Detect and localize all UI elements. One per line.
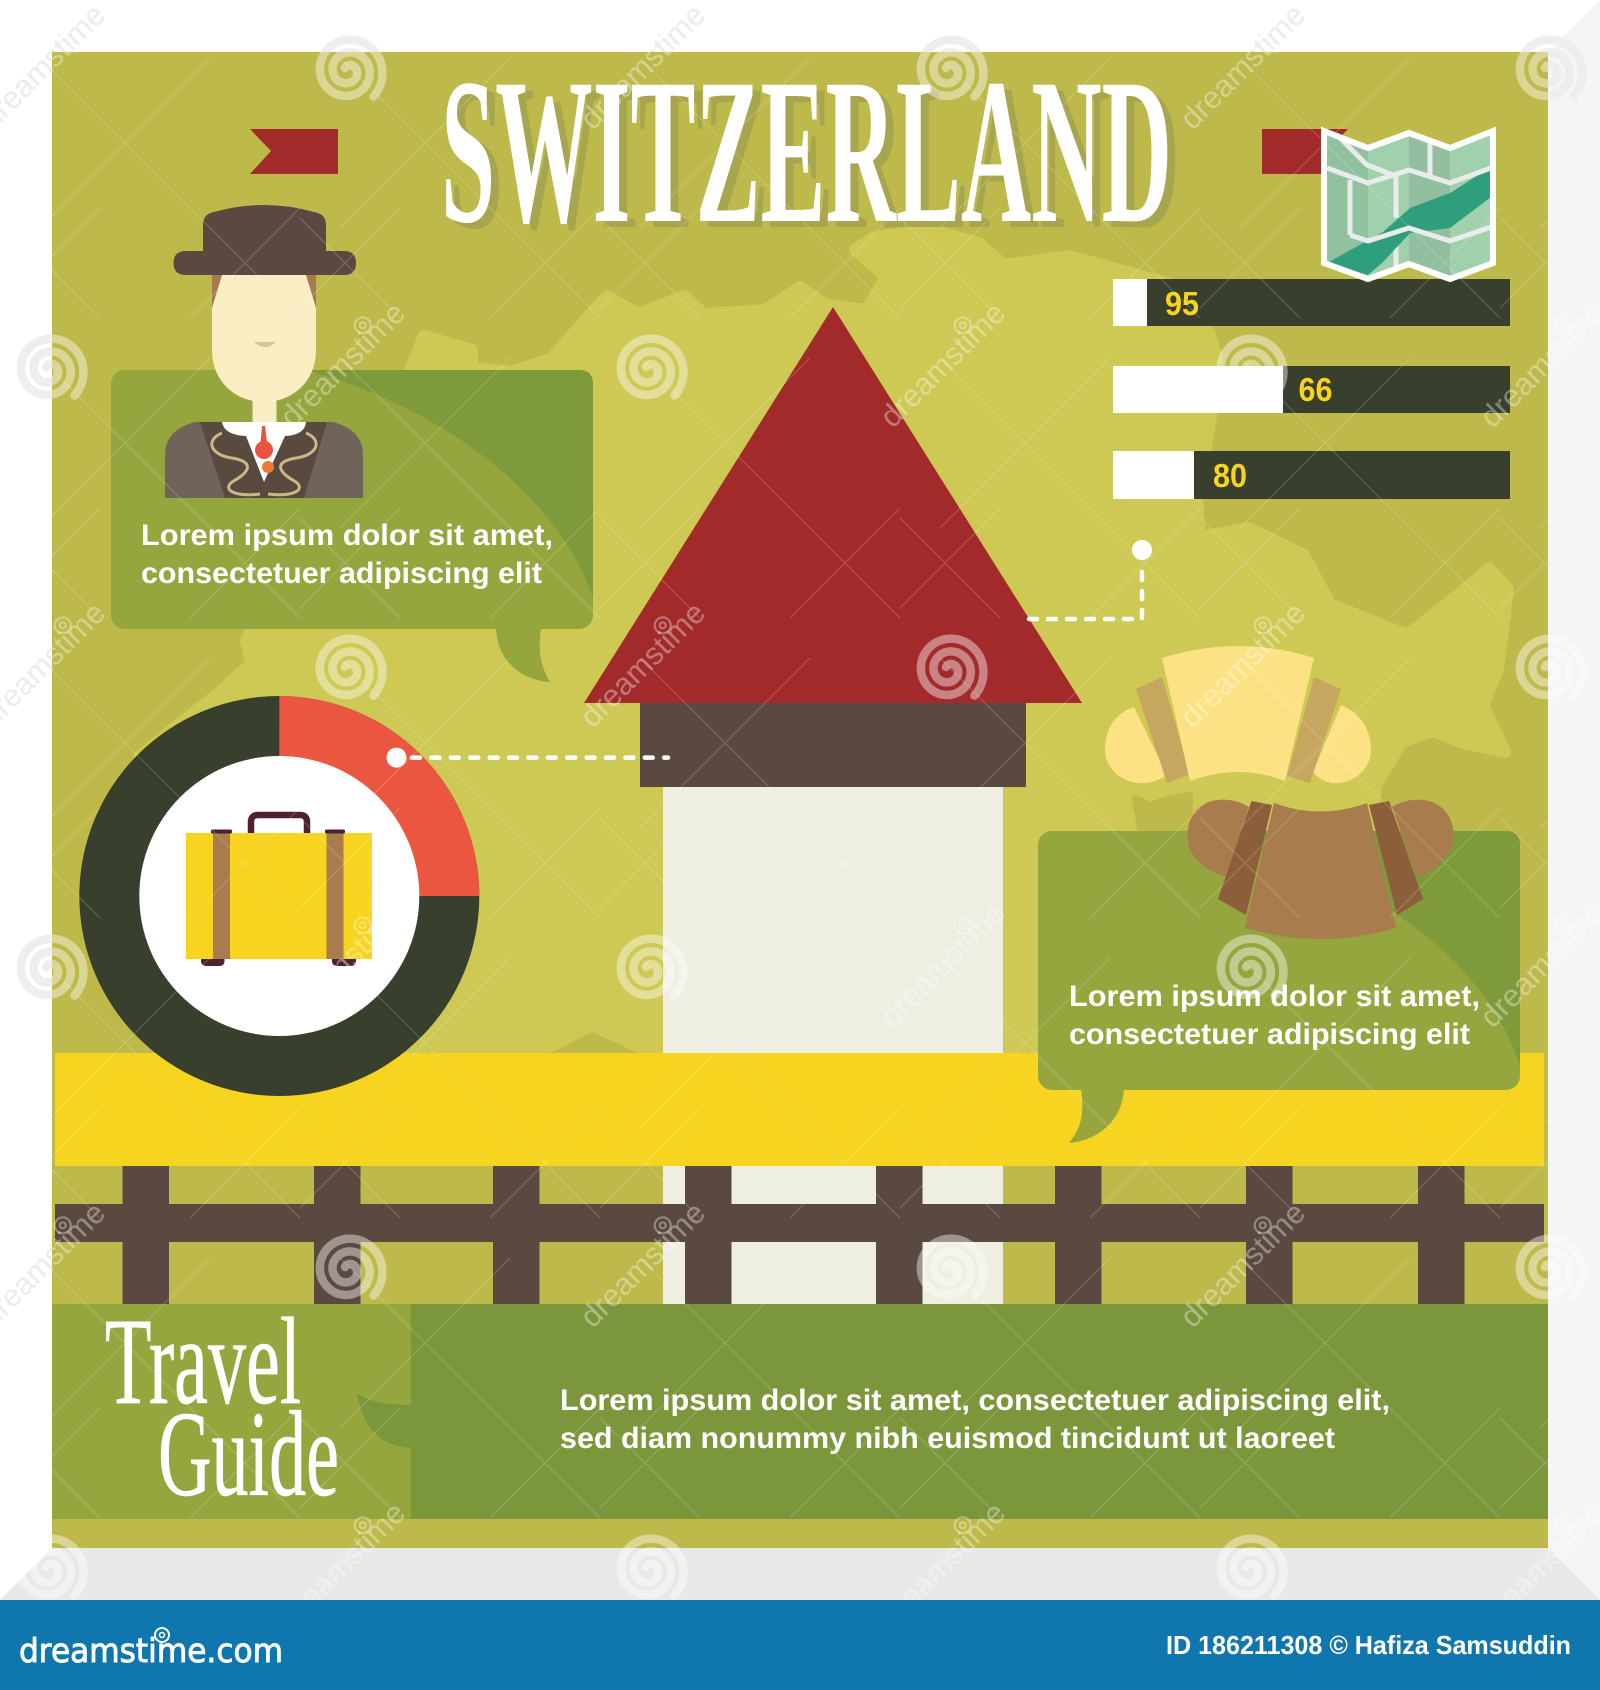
map of Switzerland silhouette [139,229,1508,1053]
tower red roof [584,307,1082,703]
panel: speech bubble right [1038,831,1520,1143]
watermark overlay: dreamstime [1173,1195,1312,1334]
text: banner: Lorem ipsum dolor sit amet, consectetuer adipiscing elit, [560,1384,1390,1417]
watermark overlay: dreamstime [273,295,412,434]
panel: bottom banner [52,1293,1548,1522]
page backdrop: dreamstime [1173,0,1312,136]
neck [252,395,276,425]
embroidery [212,433,316,495]
icon: folded map [1324,131,1493,279]
watermark overlay: dreamstime [873,895,1012,1034]
watermark overlay: dreamstime [1173,595,1312,734]
watermark overlay: dreamstime [1173,0,1312,136]
hat [174,205,356,275]
bar 66 [1113,366,1510,413]
bar 95: 95 [1165,285,1199,322]
text: left bubble: consectetuer adipiscing elit [141,557,542,590]
icon: suitcase [186,815,372,966]
bar 95 [1113,279,1510,326]
vest [200,422,327,498]
text: banner: sed diam nonummy nibh euismod tincidunt ut laoreet [560,1422,1335,1455]
icon: brown croissant [1188,800,1453,939]
tie [255,426,274,473]
icon: light croissant [1105,646,1371,783]
chart: donut with suitcase [79,696,479,1096]
connector: donut to tower [386,748,668,768]
title flag left [250,129,338,174]
text: right bubble: consectetuer adipiscing elit [1069,1018,1470,1051]
bar 80 [1113,451,1510,499]
text: left bubble: Lorem ipsum dolor sit amet, [141,519,553,552]
mouth [254,342,276,347]
title flag right [1262,129,1348,174]
tower brown band [640,703,1026,787]
text: banner [560,1384,1390,1455]
watermark overlay: dreamstime [873,295,1012,434]
yellow band over tower [663,1053,1003,1166]
watermark overlay: dreamstime [873,1495,1012,1634]
watermark overlay: dreamstime [573,0,712,136]
footer logo: dreamstime.com [19,1631,283,1670]
text: right bubble: Lorem ipsum dolor sit amet, [1069,980,1480,1013]
bar 66: 66 [1298,371,1332,408]
bar chart [1113,279,1510,499]
page backdrop: dreamstime [573,0,712,136]
title [441,36,1180,272]
yellow road band [55,1053,1544,1166]
fence [55,1166,1544,1305]
watermark overlay: dreamstime [573,595,712,734]
heading: travel guide: Guide [158,1387,339,1522]
footer bar [0,1600,1600,1690]
watermark overlay: dreamstime [573,1195,712,1334]
tower illustration [584,307,1082,1305]
footer credit: ID 186211308 © Hafiza Samsuddin [1166,1630,1571,1660]
watermark overlay: dreamstime [273,1495,412,1634]
connector: tower to bars [1029,540,1152,619]
jacket [165,422,363,498]
bar 80: 80 [1213,457,1247,494]
text: left bubble [141,519,553,590]
heading: travel guide [105,1293,339,1522]
tower wall [663,786,1003,1305]
face [212,275,316,402]
heading: travel guide: Travel [105,1293,301,1430]
panel: speech bubble left [111,370,593,682]
icon: man in traditional dress [165,205,363,498]
collar [222,422,306,482]
hair [212,272,316,308]
text: right bubble [1069,980,1480,1051]
watermark overlay: dreamstime [273,895,412,1034]
